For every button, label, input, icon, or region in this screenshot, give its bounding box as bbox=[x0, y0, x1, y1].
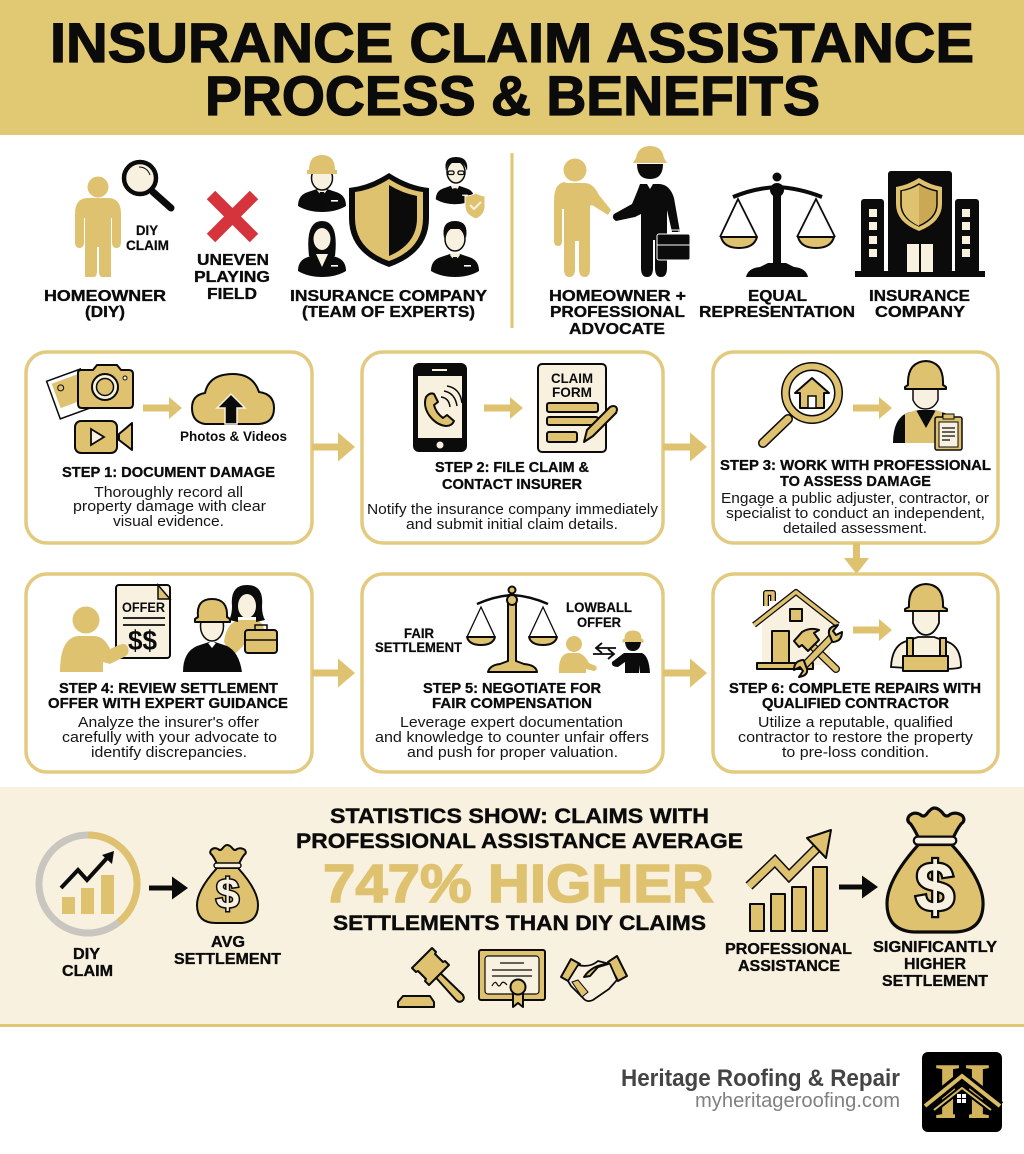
icon: magnifying glass bbox=[124, 162, 171, 208]
icon: money bag: $ bbox=[216, 870, 239, 917]
label: significantly higher settlement bbox=[873, 939, 997, 990]
heading: STEP 5: NEGOTIATE FOR bbox=[423, 681, 602, 697]
text block: property damage with clear bbox=[73, 498, 266, 515]
icon: worker with clipboard bbox=[893, 361, 962, 450]
text block bbox=[367, 501, 659, 533]
label: homeowner DIY: HOMEOWNER bbox=[44, 288, 166, 305]
arrow bbox=[853, 619, 892, 641]
footer brand bbox=[621, 1048, 1002, 1136]
panel: step 2 file claim bbox=[362, 352, 663, 543]
text block: specialist to conduct an independent, bbox=[726, 505, 985, 522]
text block: and submit initial claim details. bbox=[406, 516, 618, 533]
icon: homeowner and advocate handshake bbox=[554, 146, 690, 277]
panel: step 1 document damage bbox=[26, 352, 312, 543]
text block: identify discrepancies. bbox=[91, 744, 247, 761]
title bbox=[50, 11, 974, 127]
heading: STEP 3: WORK WITH PROFESSIONAL bbox=[720, 458, 991, 474]
logo: H bbox=[935, 1048, 990, 1136]
label: DIY claim: DIY bbox=[73, 946, 101, 963]
text block bbox=[62, 714, 277, 761]
label: uneven playing field: UNEVEN bbox=[197, 252, 269, 269]
text block bbox=[375, 714, 649, 761]
label: significantly higher settlement: SIGNIFICANTLY bbox=[873, 939, 997, 956]
label: significantly higher settlement: SETTLEMENT bbox=[882, 973, 988, 990]
website: myheritageroofing.com bbox=[695, 1090, 900, 1112]
label: fair settlement: FAIR bbox=[404, 626, 434, 641]
label: equal representation bbox=[699, 288, 855, 321]
label: professional assistance bbox=[725, 941, 852, 975]
icon: phone call bbox=[413, 363, 467, 452]
icon: negotiating people bbox=[559, 631, 650, 673]
text block: Analyze the insurer's offer bbox=[78, 714, 259, 731]
icon: homeowner with offer document bbox=[60, 585, 170, 672]
arrow: step 4 to step 5 bbox=[312, 658, 355, 688]
icon: red cross bbox=[211, 195, 254, 238]
icon: adjuster and advocate bbox=[183, 585, 277, 672]
panel: step 5 negotiate bbox=[362, 574, 663, 772]
title banner bbox=[0, 0, 1024, 135]
label: insurance company bbox=[869, 288, 970, 321]
heading: QUALIFIED CONTRACTOR bbox=[762, 696, 950, 712]
text block: Engage a public adjuster, contractor, or bbox=[721, 490, 989, 507]
icon: scale bbox=[467, 586, 557, 672]
icon: house with tools bbox=[754, 592, 842, 677]
icon: magnifier over house bbox=[763, 366, 838, 443]
icon: balanced scale bbox=[720, 172, 835, 277]
label: fair settlement bbox=[375, 626, 463, 655]
label: lowball offer bbox=[566, 600, 632, 630]
label: average settlement bbox=[174, 934, 281, 968]
text block: contractor to restore the property bbox=[738, 729, 974, 746]
panel: step 6 complete repairs bbox=[713, 574, 998, 772]
headline statistic: 747% HIGHER bbox=[323, 854, 714, 914]
icon: contractor bbox=[891, 584, 961, 671]
label: insurance company: INSURANCE bbox=[869, 288, 970, 305]
label: insurance company team bbox=[290, 288, 487, 321]
heading bbox=[435, 460, 590, 493]
label: professional assistance: ASSISTANCE bbox=[738, 958, 840, 975]
label: homeowner DIY: (DIY) bbox=[85, 304, 125, 321]
text block: to pre-loss condition. bbox=[782, 744, 929, 761]
label: homeowner and advocate: ADVOCATE bbox=[569, 321, 665, 338]
arrow bbox=[484, 397, 523, 419]
icon: claim form and pencil: CLAIM bbox=[551, 370, 593, 386]
icon: claim form and pencil: FORM bbox=[552, 384, 592, 400]
heading: CONTACT INSURER bbox=[442, 477, 583, 493]
label: homeowner DIY bbox=[44, 288, 166, 321]
label: homeowner and advocate bbox=[549, 288, 686, 338]
icon: large money bag: $ bbox=[916, 848, 954, 926]
headline statistic: SETTLEMENTS THAN DIY CLAIMS bbox=[333, 912, 706, 935]
arrow: step 2 to step 3 bbox=[663, 432, 707, 462]
text block: Leverage expert documentation bbox=[400, 714, 623, 731]
label: equal representation: EQUAL bbox=[748, 288, 807, 305]
headline statistic bbox=[296, 805, 743, 935]
brand name: Heritage Roofing & Repair bbox=[621, 1065, 900, 1092]
headline statistic: PROFESSIONAL ASSISTANCE AVERAGE bbox=[296, 830, 743, 853]
icon: certificate bbox=[479, 950, 545, 1007]
arrow bbox=[149, 876, 188, 900]
arrow: step 3 to step 6 bbox=[844, 543, 869, 574]
label: photos and videos: Photos & Videos bbox=[180, 429, 287, 444]
text block: and push for proper valuation. bbox=[407, 744, 618, 761]
label: lowball offer: OFFER bbox=[577, 615, 621, 630]
icon: large money bag bbox=[887, 808, 983, 932]
title: PROCESS & BENEFITS bbox=[205, 64, 820, 127]
heading: STEP 4: REVIEW SETTLEMENT bbox=[59, 681, 278, 697]
text block bbox=[738, 714, 974, 761]
heading bbox=[729, 681, 981, 712]
arrow: step 1 to step 2 bbox=[312, 432, 355, 462]
text block: Utilize a reputable, qualified bbox=[758, 714, 953, 731]
panel: step 4 review settlement offer bbox=[26, 574, 312, 772]
label: insurance company team: INSURANCE COMPANY bbox=[290, 288, 487, 305]
icon: gavel bbox=[398, 948, 464, 1007]
label: DIY claim bbox=[62, 946, 113, 980]
label: DIY claim: CLAIM bbox=[62, 963, 113, 980]
text block bbox=[73, 484, 266, 530]
label: uneven playing field: PLAYING bbox=[194, 269, 270, 286]
title: INSURANCE CLAIM ASSISTANCE bbox=[50, 11, 974, 74]
heading bbox=[423, 681, 602, 712]
icon: homeowner with offer document: OFFER bbox=[122, 600, 165, 615]
arrow: step 5 to step 6 bbox=[663, 658, 707, 688]
text block: detailed assessment. bbox=[783, 520, 927, 537]
icon: money bag bbox=[197, 845, 258, 923]
panel: represented homeowner comparison bbox=[549, 146, 985, 338]
chart: rising bars bbox=[749, 830, 831, 931]
text block: Thoroughly record all bbox=[94, 484, 243, 501]
icon: cloud upload bbox=[192, 374, 274, 424]
label: lowball offer: LOWBALL bbox=[566, 600, 632, 615]
text block: carefully with your advocate to bbox=[62, 729, 277, 746]
heading: STEP 1: DOCUMENT DAMAGE bbox=[62, 465, 275, 481]
heading bbox=[720, 458, 991, 490]
icon: team of experts with shield bbox=[298, 155, 485, 277]
icon: DIY claim ring chart bbox=[39, 835, 137, 933]
panel: statistics band bbox=[0, 787, 1024, 1027]
heading bbox=[48, 681, 288, 712]
label: fair settlement: SETTLEMENT bbox=[375, 640, 463, 655]
heading: STEP 2: FILE CLAIM & bbox=[435, 460, 590, 476]
label: average settlement: AVG bbox=[211, 934, 245, 951]
arrow bbox=[839, 876, 878, 898]
icon: insurance company building bbox=[855, 171, 985, 277]
label: equal representation: REPRESENTATION bbox=[699, 304, 855, 321]
label: insurance company team: (TEAM OF EXPERTS) bbox=[302, 304, 475, 321]
icon: handshake bbox=[561, 956, 627, 1001]
panel: DIY versus insurance company comparison bbox=[44, 155, 487, 321]
arrow bbox=[143, 397, 182, 419]
text block: Notify the insurance company immediately bbox=[367, 501, 659, 518]
arrow bbox=[853, 397, 892, 419]
label: uneven playing field bbox=[194, 252, 270, 303]
icon: homeowner bbox=[75, 176, 121, 277]
text block bbox=[721, 490, 989, 537]
label: significantly higher settlement: HIGHER bbox=[904, 956, 966, 973]
icon: homeowner with offer document: $$ bbox=[128, 625, 157, 656]
label: DIY claim bbox=[126, 223, 169, 253]
heading: FAIR COMPENSATION bbox=[432, 696, 592, 712]
label: uneven playing field: FIELD bbox=[207, 286, 257, 303]
text block: and knowledge to counter unfair offers bbox=[375, 729, 649, 746]
label: professional assistance: PROFESSIONAL bbox=[725, 941, 852, 958]
icon: claim form and pencil bbox=[538, 364, 617, 452]
heading: TO ASSESS DAMAGE bbox=[780, 474, 931, 490]
label: insurance company: COMPANY bbox=[875, 304, 965, 321]
icon: photo, camera and video bbox=[47, 365, 133, 453]
headline statistic: STATISTICS SHOW: CLAIMS WITH bbox=[330, 805, 709, 828]
label: homeowner and advocate: HOMEOWNER + bbox=[549, 288, 686, 305]
heading: OFFER WITH EXPERT GUIDANCE bbox=[48, 696, 288, 712]
label: homeowner and advocate: PROFESSIONAL bbox=[550, 304, 685, 321]
heading: STEP 6: COMPLETE REPAIRS WITH bbox=[729, 681, 981, 697]
text block: visual evidence. bbox=[113, 513, 224, 530]
label: DIY claim: DIY bbox=[136, 223, 158, 238]
panel: step 3 work with professional bbox=[713, 352, 998, 543]
label: average settlement: SETTLEMENT bbox=[174, 951, 281, 968]
label: DIY claim: CLAIM bbox=[126, 238, 169, 253]
